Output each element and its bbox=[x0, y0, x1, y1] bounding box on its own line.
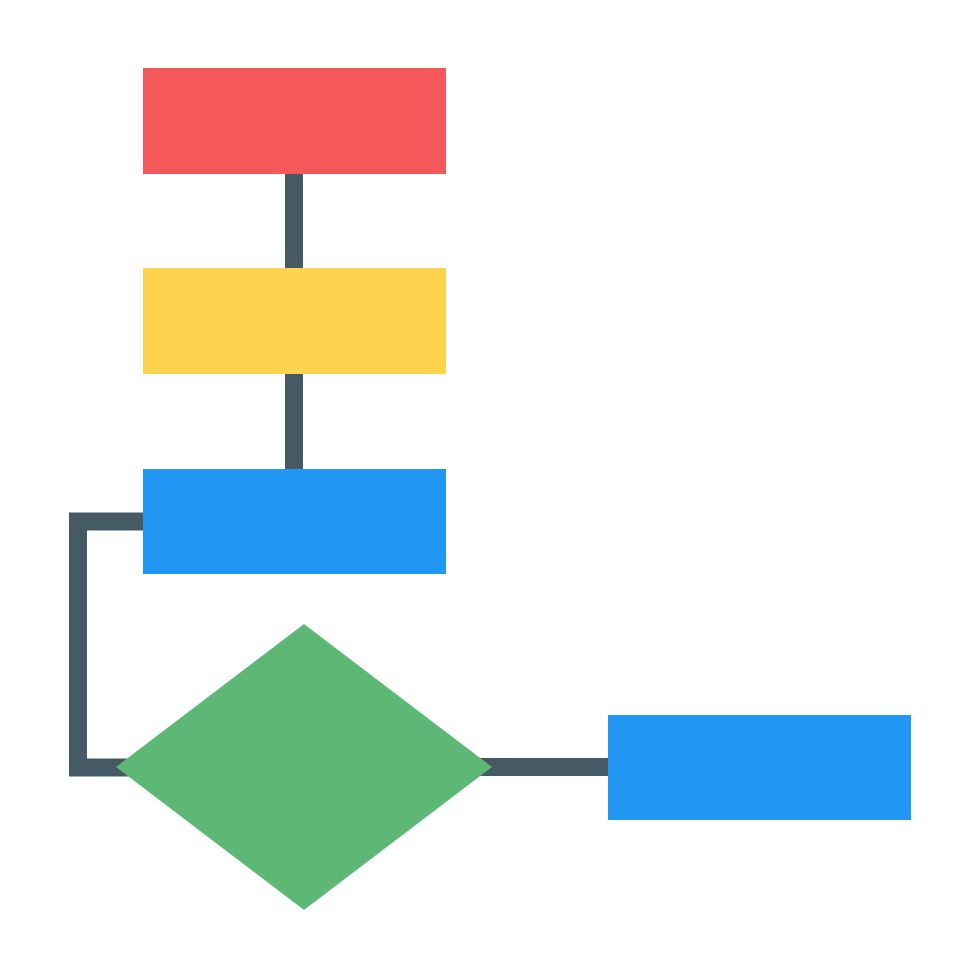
box: blue step bbox=[143, 469, 446, 574]
connector: yellow to blue bbox=[285, 370, 303, 473]
box: right blue outcome bbox=[608, 715, 911, 820]
connector: diamond to right box bbox=[480, 758, 612, 776]
box: red step bbox=[143, 68, 446, 174]
diamond: decision bbox=[116, 624, 492, 910]
connector: blue to diamond loop bbox=[78, 522, 147, 768]
box: yellow step bbox=[143, 268, 446, 374]
connector: red to yellow bbox=[285, 170, 303, 272]
